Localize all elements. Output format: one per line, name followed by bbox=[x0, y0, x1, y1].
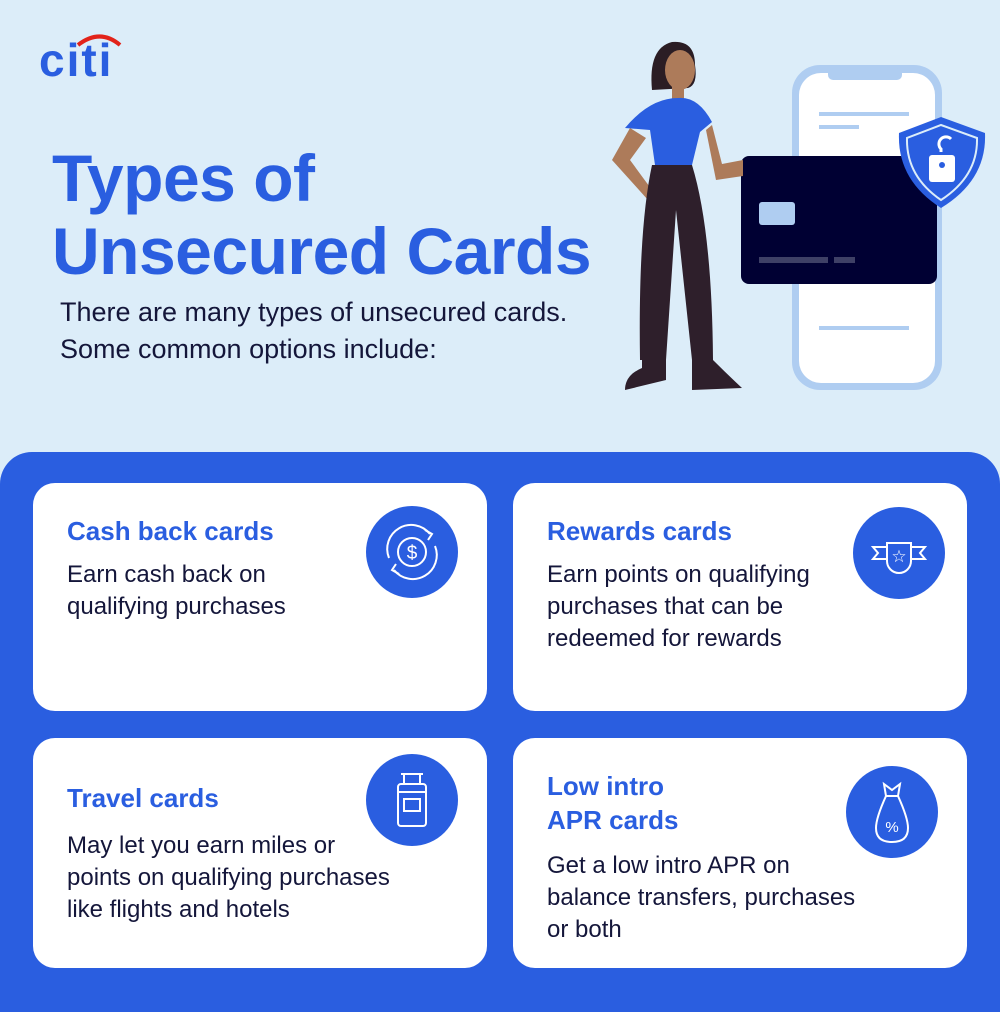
card: cash back: qualifying purchases bbox=[67, 593, 286, 620]
title: Unsecured Cards bbox=[52, 214, 591, 288]
title: Types of bbox=[52, 141, 314, 215]
icon: badge star bbox=[853, 507, 945, 599]
card: travel: May let you earn miles or bbox=[67, 832, 335, 859]
card: travel: Travel cards bbox=[67, 783, 219, 813]
icon: badge star: ☆ bbox=[891, 547, 907, 566]
card: cash back bbox=[33, 483, 487, 711]
subtitle bbox=[60, 297, 567, 364]
icon: money bag percent: % bbox=[885, 819, 899, 836]
card: low intro APR: Low intro bbox=[547, 771, 664, 801]
card: cash back: Earn cash back on bbox=[67, 561, 266, 588]
card: low intro APR bbox=[513, 738, 967, 968]
card: rewards: purchases that can be bbox=[547, 593, 783, 620]
card: low intro APR: Get a low intro APR on bbox=[547, 852, 790, 879]
card: low intro APR: or both bbox=[547, 916, 622, 943]
card: cash back: Cash back cards bbox=[67, 516, 274, 546]
title bbox=[52, 141, 591, 288]
card: travel: like flights and hotels bbox=[67, 896, 290, 923]
illustration: woman with card and phone bbox=[612, 42, 986, 390]
icon: dollar cycle bbox=[366, 506, 458, 598]
card: rewards: Rewards cards bbox=[547, 516, 732, 546]
card: rewards: Earn points on qualifying bbox=[547, 561, 810, 588]
icon: money bag percent bbox=[846, 766, 938, 858]
card: travel: points on qualifying purchases bbox=[67, 864, 390, 891]
card: rewards bbox=[513, 483, 967, 711]
icon: luggage bbox=[366, 754, 458, 846]
card: rewards: redeemed for rewards bbox=[547, 625, 782, 652]
panel: card types bbox=[0, 452, 1000, 1012]
card: low intro APR: balance transfers, purchases bbox=[547, 884, 855, 911]
card: low intro APR: APR cards bbox=[547, 805, 678, 835]
card: travel bbox=[33, 738, 487, 968]
icon: dollar cycle: $ bbox=[407, 543, 418, 564]
subtitle: Some common options include: bbox=[60, 334, 437, 364]
subtitle: There are many types of unsecured cards. bbox=[60, 297, 567, 327]
